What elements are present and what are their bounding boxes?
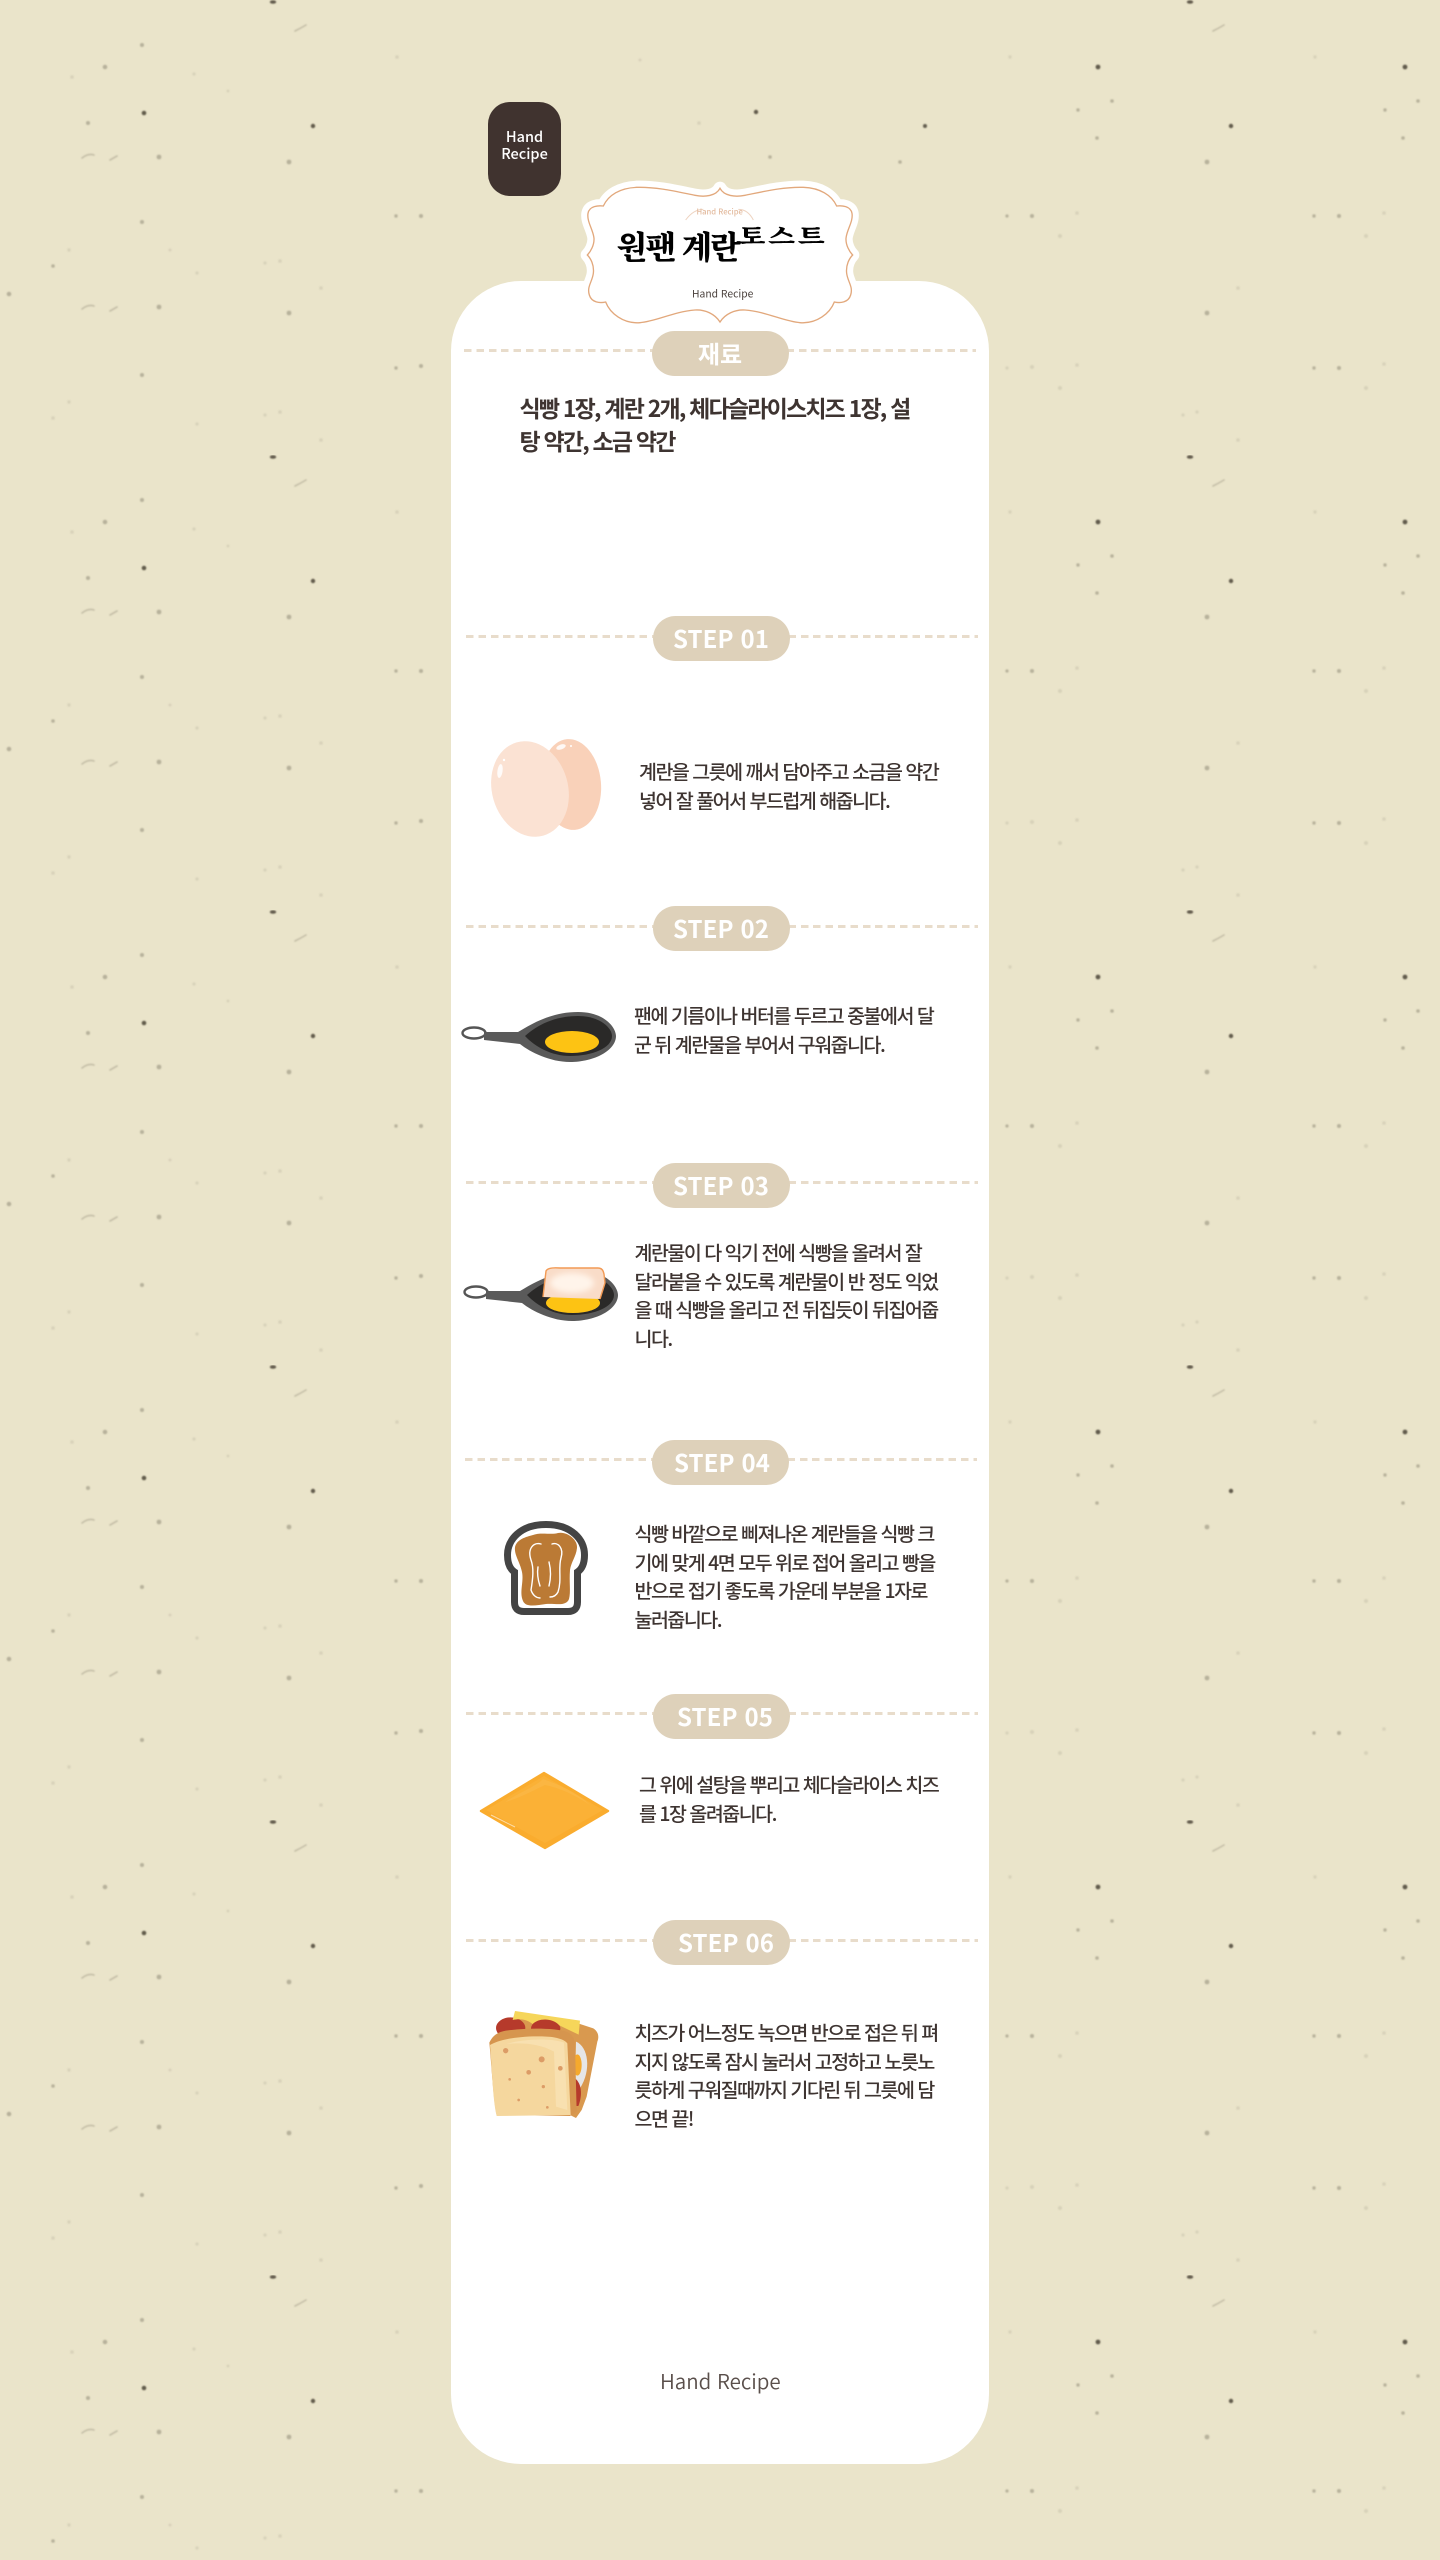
section header: STEP 03: [466, 1163, 978, 1208]
text: step 04: 기에 맞게 4면 모두 위로 접어 올리고 빵을: [634, 1547, 935, 1576]
text: step 04: 식빵 바깥으로 삐져나온 계란들을 식빵 크: [634, 1518, 934, 1547]
section header: STEP 02: STEP 02: [673, 910, 769, 944]
badge: Hand Recipe: [488, 102, 561, 196]
section header: STEP 05: [466, 1694, 978, 1739]
footer text: Hand Recipe: [660, 2364, 781, 2394]
section header: 재료: [464, 331, 976, 376]
text: step 01: [639, 756, 940, 814]
text: step 03: 달라붙을 수 있도록 계란물이 반 정도 익었: [634, 1266, 938, 1295]
text: ingredients: [520, 390, 910, 457]
section header: STEP 03: STEP 03: [673, 1166, 769, 1202]
text: step 02: 군 뒤 계란물을 부어서 구워줍니다.: [634, 1029, 884, 1058]
text: step 06: 지지 않도록 잠시 눌러서 고정하고 노릇노: [634, 2046, 934, 2075]
text: step 03: [634, 1237, 938, 1352]
icon: sandwich: [489, 2011, 598, 2118]
section header: STEP 02: [466, 906, 978, 951]
section header: STEP 06: STEP 06: [678, 1924, 774, 1958]
text: step 02: 팬에 기름이나 버터를 두르고 중불에서 달: [634, 1000, 933, 1029]
text: step 05: [639, 1769, 939, 1827]
section header: STEP 05: STEP 05: [677, 1698, 773, 1732]
text: step 06: [634, 2017, 938, 2132]
text: step 04: 반으로 접기 좋도록 가운데 부분을 1자로: [634, 1575, 927, 1604]
text: step 01: 넣어 잘 풀어서 부드럽게 해줍니다.: [639, 785, 889, 814]
section header: STEP 04: STEP 04: [674, 1444, 770, 1478]
panel: recipe card: [451, 281, 989, 2464]
section header: STEP 01: [466, 616, 978, 661]
text: ingredients: 탕 약간, 소금 약간: [520, 423, 675, 457]
text: ingredients: 식빵 1장, 계란 2개, 체다슬라이스치즈 1장, 설: [520, 390, 910, 424]
icon: pan with egg: [461, 1012, 616, 1062]
badge: Hand Recipe: Recipe: [501, 143, 548, 164]
icon: pan with bread: [463, 1267, 618, 1321]
section header: STEP 06: [466, 1920, 978, 1965]
text: step 05: 그 위에 설탕을 뿌리고 체다슬라이스 치즈: [639, 1769, 938, 1798]
text: step 06: 치즈가 어느정도 녹으면 반으로 접은 뒤 펴: [634, 2017, 938, 2046]
text: step 04: 눌러줍니다.: [634, 1604, 721, 1633]
section header: STEP 01: STEP 01: [673, 620, 769, 654]
icon: cheese slice: [480, 1772, 610, 1850]
title label: Hand Recipe: [692, 285, 754, 300]
title label: 원팬 계란: [617, 223, 741, 269]
text: step 04: [634, 1518, 936, 1633]
text: step 01: 계란을 그릇에 깨서 담아주고 소금을 약간: [639, 756, 938, 785]
text: step 06: 릇하게 구워질때까지 기다린 뒤 그릇에 담: [634, 2074, 934, 2103]
text: step 05: 를 1장 올려줍니다.: [639, 1798, 776, 1827]
section header: 재료: 재료: [698, 334, 742, 370]
text: step 03: 계란물이 다 익기 전에 식빵을 올려서 잘: [634, 1237, 921, 1266]
icon: toast with spread: [504, 1521, 588, 1615]
text: step 03: 을 때 식빵을 올리고 전 뒤집듯이 뒤집어줍: [634, 1294, 938, 1323]
title label: Hand Recipe: [696, 206, 743, 217]
section header: STEP 04: [465, 1440, 977, 1485]
text: step 03: 니다.: [634, 1323, 672, 1352]
text: step 06: 으면 끝!: [634, 2103, 693, 2132]
title label: [580, 180, 860, 324]
badge: Hand Recipe: Hand: [506, 126, 543, 147]
text: step 02: [634, 1000, 934, 1058]
title label: 토스트: [738, 219, 827, 251]
icon: eggs: [491, 739, 602, 837]
